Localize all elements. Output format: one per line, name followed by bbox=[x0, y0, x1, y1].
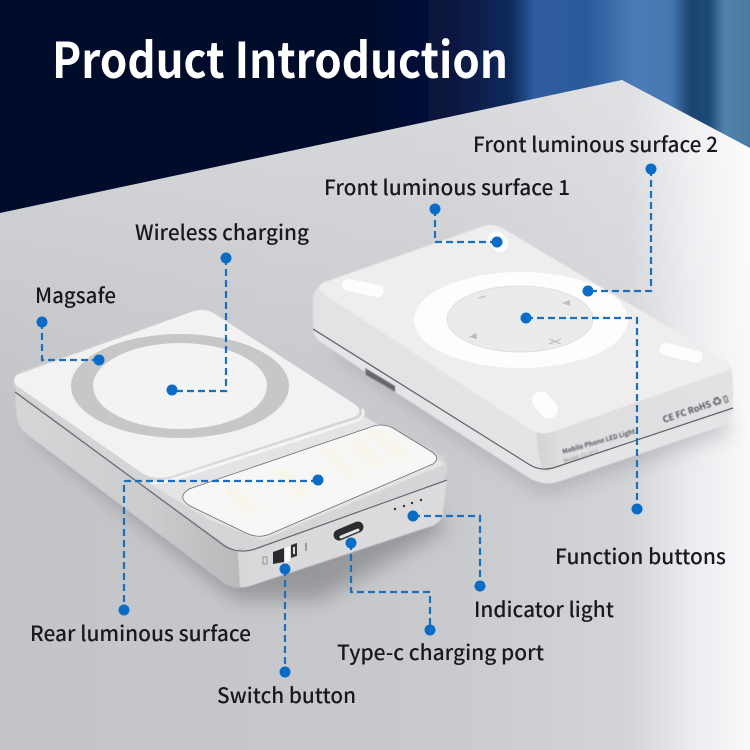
callout: type-c charging port: Type-c charging port bbox=[337, 637, 544, 667]
callout: wireless charging bbox=[135, 217, 309, 396]
callout: function buttons: Function buttons bbox=[555, 541, 726, 571]
left device top surface bbox=[14, 310, 447, 549]
magsafe ring bbox=[71, 334, 289, 438]
right device notch bbox=[365, 368, 395, 392]
right device top surface bbox=[319, 225, 730, 433]
device markings: CE FC RoHS ♻ ▯ bbox=[661, 391, 730, 426]
device markings: Mobile Phone LED Light bbox=[561, 425, 636, 456]
callout: magsafe: Magsafe bbox=[35, 280, 116, 310]
callout: wireless charging: Wireless charging bbox=[135, 217, 309, 247]
switch and small port bbox=[263, 543, 307, 564]
product: left device (rear side) bbox=[14, 310, 448, 600]
front luminous pills bbox=[341, 228, 704, 422]
indicator LEDs bbox=[394, 499, 422, 510]
device markings bbox=[561, 391, 730, 465]
right device slope and sides bbox=[313, 284, 543, 472]
product: right device (front side) bbox=[313, 225, 735, 495]
callout: magsafe bbox=[35, 280, 116, 366]
front luminous surface 2 ring bbox=[414, 272, 628, 368]
callout: switch button bbox=[217, 564, 356, 710]
right device shadow bbox=[330, 320, 735, 495]
background: dark navy window wall bbox=[0, 0, 750, 235]
callout: front luminous surface 1: Front luminous surface 1 bbox=[324, 172, 570, 202]
callout: front luminous surface 2 bbox=[473, 129, 718, 296]
callout: rear luminous surface bbox=[30, 474, 324, 648]
type-c port bbox=[339, 527, 358, 537]
title: Product Introduction bbox=[52, 22, 508, 93]
magsafe panel bbox=[14, 310, 360, 478]
function button disc bbox=[447, 286, 593, 352]
lid right surface bbox=[150, 417, 445, 540]
callout: indicator light: Indicator light bbox=[474, 594, 614, 624]
callout: indicator light bbox=[408, 510, 614, 624]
callout: front luminous surface 1 bbox=[324, 172, 570, 248]
rear luminous panel bbox=[183, 425, 437, 536]
left device body sides bbox=[15, 392, 447, 588]
callout: function buttons bbox=[520, 312, 726, 571]
callout: switch button: Switch button bbox=[217, 680, 356, 710]
device markings: Model: CL-V17 bbox=[562, 447, 599, 465]
callout: type-c charging port bbox=[337, 538, 544, 667]
callout: rear luminous surface: Rear luminous surface bbox=[30, 618, 251, 648]
left device shadow bbox=[30, 420, 448, 600]
right device lower band bbox=[313, 330, 733, 484]
callout: front luminous surface 2: Front luminous surface 2 bbox=[473, 129, 718, 159]
